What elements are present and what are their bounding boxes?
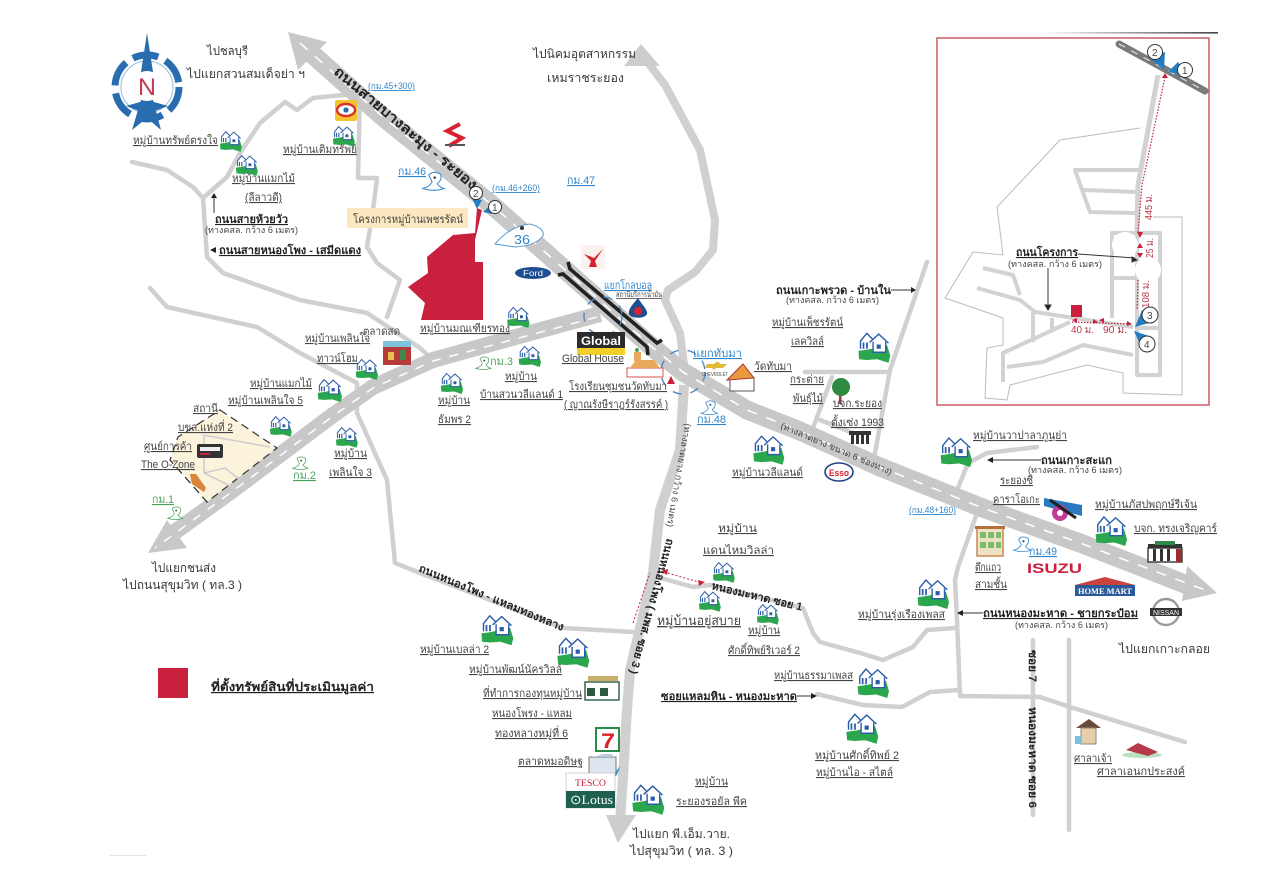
shrine icon [1075,719,1101,744]
arrow: Huai Wua road [211,193,217,213]
inset main road [1119,44,1205,91]
house: Thamphon 2 [441,373,463,394]
inset marker 2 [1148,44,1165,70]
road note: asphalt width: (ทางลาดยาง กว้าง 6 เมตร) [665,423,693,528]
label: Monthian Thong: หมู่บ้านมณเฑียรทอง [420,322,510,335]
label: shrine: ศาลาเจ้า [1074,753,1112,765]
house: Royal Peak [632,785,664,815]
label: bus terminal 2: บขส.แห่งที่ 2 [178,419,233,434]
km label 46+260: (กม.46+260) [492,183,540,193]
label: Thamphon 2: ธัมพร 2 [438,414,471,426]
house: Suan Walee [519,346,541,367]
direction: Eastern Industrial: ไปนิคมอุตสาหกรรม [532,47,636,62]
road note: Koh Samaek: (ทางคสล. กว้าง 6 เมตร) [1028,465,1122,475]
project label box: โครงการหมู่บ้านเพชรรัตน์ [353,212,463,226]
inset dotted distance lines [1072,77,1165,324]
label: Phloen Jai 3: เพลินใจ 3 [329,466,372,479]
Home Mart logo: HOME MART [1078,586,1132,596]
direction: Hemaraj: เหมราชระยอง [547,71,624,85]
label: Wat Thap Ma: วัดทับมา [754,361,792,373]
label: Wali Land: หมู่บ้านวลีแลนด์ [732,466,803,479]
arrow: Laem Hin road [797,693,817,699]
label: Global House: Global House [562,353,624,365]
inset marker 3 [1135,307,1158,327]
arrow: Koh Samet road [987,457,1041,463]
label: shopping center: ศูนย์การค้า [144,440,192,453]
label: school sub name: ( ญาณรังษีราฎร์รังสรรค์ ) [564,398,668,411]
inset distance 40 m: 40 ม. [1071,325,1094,336]
km marker 2 [293,457,308,470]
label: Ban Suan Walee Land 1: บ้านสวนวลีแลนด์ 1 [480,388,563,401]
road name: Soi 3 vertical: ถนนหนองโพง ( มพส. ซอย 3 ) [627,537,678,676]
house: Yu Sabai [699,592,721,612]
label: Phetcharat: หมู่บ้านเพ็ชรรัตน์ [772,315,843,329]
inset distance 108 m: 108 ม. [1141,280,1152,308]
label: village Daen Mai: หมู่บ้าน [718,523,758,535]
label: village Royal Peak: หมู่บ้าน [695,776,728,788]
inset distance 445 m: 445 ม. [1144,194,1155,220]
road name: Koh Phruat - Ban Nai: ถนนเกาะพรวด - บ้านใน [776,283,891,297]
project site red plot [408,208,483,320]
PTT logo [629,298,647,318]
branch highway to Sukhumvit [148,314,600,553]
school icon [627,348,675,384]
direction: Chonburi: ไปชลบุรี [206,44,249,59]
inset project road note: (ทางคสล. กว้าง 6 เมตร) [1008,259,1102,269]
direction: PMY junction: ไปแยก พี.เอ็ม.วาย. [632,826,730,841]
7-Eleven logo: 7 [601,730,615,753]
direction: Koh Kloi: ไปแยกเกาะกลอย [1118,642,1210,656]
market icon [588,754,620,781]
inset pointer arrows [1045,254,1137,310]
Tesco Lotus logo: TESCO [575,778,607,788]
label: village Sak Thip: หมู่บ้าน [748,625,780,637]
inset arrowheads [1072,73,1168,326]
direction: Suan Somdet: ไปแยกสวนสมเด็จย่า ฯ [186,66,305,81]
arrowhead: south road [606,815,636,843]
tree icon [832,378,850,404]
label: Thap Ma junction: แยกทับมา [693,348,742,360]
Chevrolet logo: CHEVROLET [702,372,728,378]
house: Phatnakorn [557,638,589,668]
label: station: สถานี [193,402,218,415]
label: village Suan Walee: หมู่บ้าน [505,371,537,383]
label: shophouse: ตึกแถว [975,562,1001,574]
label: multi-purpose hall: ศาลาเอนกประสงค์ [1097,765,1185,778]
junction circles [584,297,705,394]
label: gas station: สถานีบริการน้ำมัน [616,288,662,299]
house: Bella 2 [481,616,513,645]
road name: Nong Phong - Laem Thong Lang: ถนนหนองโพง - แหลมทองหลาง [417,561,566,634]
inset project road label: ถนนโครงการ [1016,245,1078,259]
label: townhome: ทาวน์โฮม [317,351,358,365]
inset marker 2: 2 [1152,48,1158,59]
Esso logo: Esso [829,468,849,478]
Nissan logo [1150,599,1182,625]
house: Monthian Thong [507,307,530,328]
label: Nong Phrong - Laem: หนองโพรง - แหลม [492,706,572,720]
legend text: ที่ตั้งทรัพย์สินที่ประเมินมูลค่า [211,677,374,695]
highway: Bang Lamung - Rayong [288,32,1217,601]
arrow: Nong Mahat road [957,610,983,616]
inset outline boundary [945,128,1182,400]
label: Toem Sap: หมู่บ้านเติมทรัพย์ [283,143,357,156]
label: Maek Mai 2: หมู่บ้านแมกไม้ [250,377,312,390]
route markers 1 and 2: 2 [473,189,479,200]
Chevrolet logo [702,362,728,378]
road name: Nong Mahat Soi 6: หนองมะหาด ซอย 6 [1026,707,1038,808]
route markers 1 and 2 [470,186,502,214]
shophouse icon [975,526,1005,556]
house: Wali Land [753,436,784,465]
label: village fund office: ที่ทำการกองทุนหมู่บ้าน [483,685,582,700]
house: Sak Thip River [757,605,779,625]
inset road network [977,75,1161,382]
overpass [558,262,662,355]
road name: Soi 7: ซอย 7 [1026,650,1038,682]
Ford logo: Ford [523,269,543,278]
7-Eleven logo [596,728,619,753]
km label 48: กม.48 [697,414,726,426]
arrow: Nong Phong road [210,247,216,253]
bus icon [197,444,223,458]
label: karaoke: คาราโอเกะ [993,492,1040,506]
project label box [347,208,468,228]
label: Maek Mai: หมู่บ้านแมกไม้ [232,172,295,185]
inset marker 4: 4 [1144,340,1150,351]
label: Sak Thip River 2: ศักดิ์ทิพย์ริเวอร์ 2 [728,642,800,657]
highway 36 marker [495,224,543,247]
label: Thara Place: หมู่บ้านธรรมาเพลส [774,670,853,682]
road note: main highway: (ทางลาดยาง ขนาด 6 ช่องทาง) [779,421,894,477]
arrow: Koh Phruat road [891,287,916,293]
km marker 49 [1014,537,1031,552]
building icon [849,431,871,444]
road name: Huai Wua: ถนนสายห้วยวัว [215,213,288,226]
road name: Bang Lamung - Rayong: ถนนสายบางละมุง - ระยอง [330,63,481,193]
road name: Nong Mahat - Chai Krapom: ถนนหนองมะหาด - ชายกระป๋อม [983,607,1138,620]
road name: Nong Phong - Samet Daeng: ถนนสายหนองโพง - เสมีดแดง [219,243,361,257]
label: Phat Pruk Regent: หมู่บ้านภัสปพฤกษ์รีเจ้น [1095,498,1197,511]
label: The O-Zone: The O-Zone [141,459,195,471]
label: village Thamphon: หมู่บ้าน [438,395,470,407]
label: rabbit: กระต่าย [790,374,824,386]
label: Rayong Co.: บจก.ระยอง [833,398,882,410]
Suzuki logo [445,124,465,146]
inset marker 3: 3 [1147,311,1153,322]
house: Phloen Jai [356,359,378,380]
label: Song Charoen Car: บจก. ทรงเจริญคาร์ [1134,522,1217,535]
label: Rayong Royal Peak: ระยองรอยัล พีค [676,795,747,808]
label: Sak Thip 2: หมู่บ้านศักดิ์ทิพย์ 2 [815,747,899,762]
km marker 48 [701,401,718,415]
house: Thara Place [858,669,889,698]
house: Maek Mai [236,156,258,176]
house: Rung Rueang [918,580,949,609]
Tesco Lotus logo: ⊙Lotus [570,792,613,807]
inset distance 25 m: 25 ม. [1145,238,1156,258]
house: Phloen Jai 3 [336,428,358,448]
label: Phatnakorn Ville: หมู่บ้านพัฒน์นัครวิลล์ [469,663,562,676]
label: Koh Global junction: แยกโกลบอล [604,278,652,292]
label: Leelawadee: (ลีลาวดี) [245,191,282,204]
road name: Koh Samaek: ถนนเกาะสะแก [1041,455,1112,467]
legend swatch [158,668,188,698]
label: school name: โรงเรียนชุมชนวัดทับมา [569,379,667,393]
inset marker 1: 1 [1182,66,1188,77]
label: Mo Dit market: ตลาดหมอดิษฐ [518,756,583,768]
label: Tang Seng 1993: ตั้งเซ่ง 1993 [831,414,884,429]
label: Daen Mai Villa: แดนไหมวิลล่า [703,544,774,557]
house: Sap Trongjai [220,132,242,152]
inset site marker [1071,305,1082,317]
label: three floors: สามชั้น [975,576,1007,591]
direction: Chon Song junction: ไปแยกชนส่ง [151,561,216,575]
label: plants: พันธุ์ไม้ [793,392,823,405]
house: Phat Pruk [1096,517,1127,546]
km label 1: กม.1 [152,494,174,506]
Global House logo [577,332,625,355]
house: Maek Mai 2 [318,380,342,402]
Esso logo [825,463,853,481]
direction: to Sukhumvit road: ไปถนนสุขุมวิท ( ทล.3 ) [122,578,242,593]
temple icon [727,364,754,391]
gas station logo [335,100,357,121]
km label 3: กม.3 [490,356,513,368]
km marker 1 [168,507,183,520]
label: village: หมู่บ้าน [334,448,367,460]
inset marker 4 [1134,331,1155,352]
pavilion icon [1122,743,1162,758]
Nissan logo: NISSAN [1153,610,1179,617]
km label 2: กม.2 [293,470,316,482]
label: Phloen Jai 5: หมู่บ้านเพลินใจ 5 [228,394,303,407]
house: Phloen Jai 5 [270,417,292,437]
label: Lakeville: เลควิลล์ [791,335,824,348]
road note: Nong Mahat: (ทางคสล. กว้าง 6 เมตร) [1015,620,1108,630]
highway 36 marker: 36 [514,232,530,247]
km marker 46 [423,172,444,190]
km marker 3 [476,357,491,370]
road note: Huai Wua: (ทางคสล. กว้าง 6 เมตร) [205,225,298,235]
bus station area [170,410,277,502]
km label 48+160: (กม.48+160) [909,505,956,515]
km label 47: กม.47 [567,175,595,187]
compass: north: N [138,74,156,101]
label: Phloen Jai townhome: หมู่บ้านเพลินใจ [305,332,370,345]
Home Mart logo [1075,577,1135,596]
road name: Nong Mahat Soi 1: หนองมะหาด ซอย 1 [710,580,804,614]
house: Wapa Lagoon [941,438,972,467]
label: Thong Lang Moo 6: ทองหลางหมู่ที่ 6 [495,725,568,740]
label: Rung Rueang Place: หมู่บ้านรุ่งเรืองเพลส [858,608,945,621]
fresh market picture [383,341,411,365]
Garuda logo [581,245,605,269]
direction: Sukhumvit 3: ไปสุขุมวิท ( ทล. 3 ) [629,844,733,859]
route markers 1 and 2: 1 [492,203,498,214]
house: Phetcharat [858,333,890,363]
label: fresh market: ตลาดสด [363,326,400,338]
house: Sak Thip 2 [846,714,878,744]
label: Bella 2: หมู่บ้านเบลล่า 2 [420,644,489,656]
dotted distance arrow [633,569,705,623]
minor roads network [132,55,1185,830]
label: Wapa Lagoon: หมู่บ้านวาปาลาภูนฺย่า [973,430,1067,442]
km label 46: กม.46 [398,166,426,178]
panel: inset detail map [937,38,1209,405]
Ford logo [515,267,551,279]
car showroom icon [1148,541,1182,562]
label: Rayong Sea: ระยองซี [1000,474,1033,487]
Tesco Lotus logo [566,773,615,808]
inset marker 1 [1168,62,1192,78]
road name: Laem Hin - Nong Mahat: ซอยแหลมหิน - หนองมะหาด [661,690,797,703]
office icon [585,676,619,700]
Isuzu logo: ISUZU [1027,560,1082,576]
road note: Koh Phruat: (ทางคสล. กว้าง 6 เมตร) [786,295,879,305]
label: Yu Sabai: หมู่บ้านอยู่สบาย [657,613,741,629]
Global House logo: Global [581,334,621,348]
arrowhead: north road [624,44,660,66]
label: I-Style: หมู่บ้านไอ - สไตล์ [816,766,893,779]
inset distance 90 m: 90 ม. [1103,325,1127,336]
house: Daen Mai [713,563,735,583]
km label 45+300: (กม.45+300) [368,81,415,91]
house: Toem Sap [333,127,355,147]
karaoke logo [1044,498,1082,521]
km label 49: กม.49 [1029,546,1057,558]
compass: north [115,33,179,130]
label: Sap Trongjai: หมู่บ้านทรัพย์ตรงใจ [133,134,218,147]
